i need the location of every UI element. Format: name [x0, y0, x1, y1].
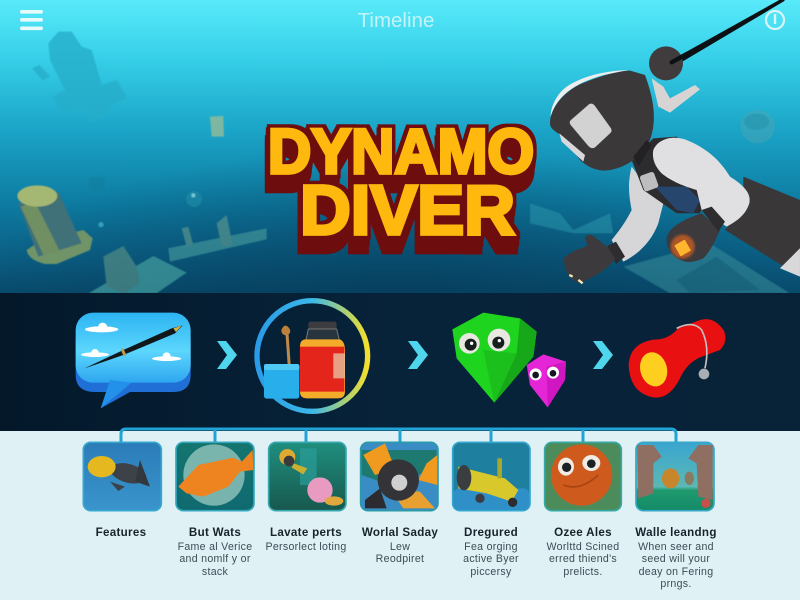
arrow 3: [593, 341, 613, 369]
title: Dynamo Diver: DIVER: [300, 171, 515, 249]
cable ball: [649, 46, 683, 80]
pink gem: [527, 354, 566, 407]
hamburger menu icon: [20, 10, 43, 30]
caption: Dregured: active Byer: [463, 553, 519, 565]
diver character: [550, 0, 800, 283]
cable: [672, 0, 785, 66]
caption: Worlal Saday: Reodpiret: [376, 553, 424, 565]
thumbnail 2: But Wats: [176, 442, 254, 511]
icon: speech bubble with pen: [76, 313, 191, 408]
caption: Dregured: Fea orging: [464, 541, 518, 553]
white bracket arm: [652, 78, 700, 113]
caption: But Wats: and nomlf y or: [179, 553, 251, 565]
title: Dynamo Diver: [268, 117, 534, 249]
ring: [257, 301, 368, 411]
thumbnail 7: Walle leandng: [636, 442, 714, 511]
caption: Features: Features: [96, 526, 146, 539]
bottom light panel: [0, 431, 800, 600]
caption: Dregured: Dregured: [464, 526, 518, 539]
diver far arm: [612, 167, 663, 262]
background submarine silhouette: [32, 32, 127, 122]
caption: Walle leandng: prngs.: [660, 578, 692, 590]
dark timeline band: [0, 293, 800, 431]
thumbnail 5: Dregured: [453, 442, 530, 511]
thumbnail 4: Worlal Saday: [361, 442, 438, 511]
arrow 2: [408, 341, 428, 369]
caption: Walle leandng: seed will your: [642, 553, 710, 565]
connector tree: [121, 429, 676, 442]
power icon: [766, 11, 784, 29]
caption: Lavate perts: Persorlect loting: [265, 541, 347, 553]
caption: Walle leandng: When seer and: [638, 541, 714, 553]
header: Timeline: Timeline: [358, 9, 434, 32]
caption: Lavate perts: Lavate perts: [270, 526, 342, 539]
caption: Ozee Ales: prelicts.: [563, 566, 603, 578]
thumbnail 1: Features: [83, 442, 161, 511]
background wreck and relics, right: [530, 110, 790, 293]
background coral ruins: [88, 116, 267, 293]
caption: But Wats: Fame al Verice: [178, 541, 252, 553]
caption: But Wats: [178, 526, 252, 578]
caption: Walle leandng: [635, 526, 717, 590]
caption: Dregured: piccersy: [470, 566, 512, 578]
thumbnail 3: Lavate perts: [269, 442, 346, 511]
diver neck: [633, 140, 652, 167]
background sunken tower: [17, 185, 93, 264]
caption: Ozee Ales: erred thiend's: [549, 553, 617, 565]
caption: Ozee Ales: [547, 526, 619, 578]
brush: [285, 333, 291, 365]
caption: Walle leandng: deay on Fering: [639, 566, 713, 578]
icon: green and pink gem characters: [452, 313, 566, 407]
caption: But Wats: stack: [202, 566, 229, 578]
diver glove with light: [667, 213, 720, 262]
caption: Worlal Saday: [362, 526, 438, 565]
icon: paint jar and brush in ring: [257, 301, 368, 411]
green gem: [452, 313, 537, 403]
caption: Dregured: [463, 526, 519, 578]
diver glove left: [564, 235, 615, 283]
caption: Worlal Saday: Worlal Saday: [362, 526, 438, 539]
caption: Ozee Ales: Worlttd Scined: [547, 541, 619, 553]
caption: Walle leandng: Walle leandng: [635, 526, 717, 539]
caption: Ozee Ales: Ozee Ales: [554, 526, 612, 539]
thumbnail 6: Ozee Ales: [545, 442, 621, 511]
title: Dynamo Diver: DYNAMO: [268, 117, 534, 187]
diver helmet: [550, 71, 654, 171]
diver torso vest: [632, 137, 717, 213]
caption: Worlal Saday: Lew: [390, 541, 410, 553]
paint jar: [308, 322, 337, 329]
blue cup: [264, 364, 299, 399]
caption: But Wats: But Wats: [189, 526, 241, 539]
diver legs: [725, 177, 800, 268]
arrow 1: [217, 341, 237, 369]
diver upper arm: [653, 138, 750, 227]
hero underwater background: [0, 0, 800, 294]
caption: Lavate perts: [265, 526, 347, 553]
icon: red flashlight: [629, 319, 725, 398]
